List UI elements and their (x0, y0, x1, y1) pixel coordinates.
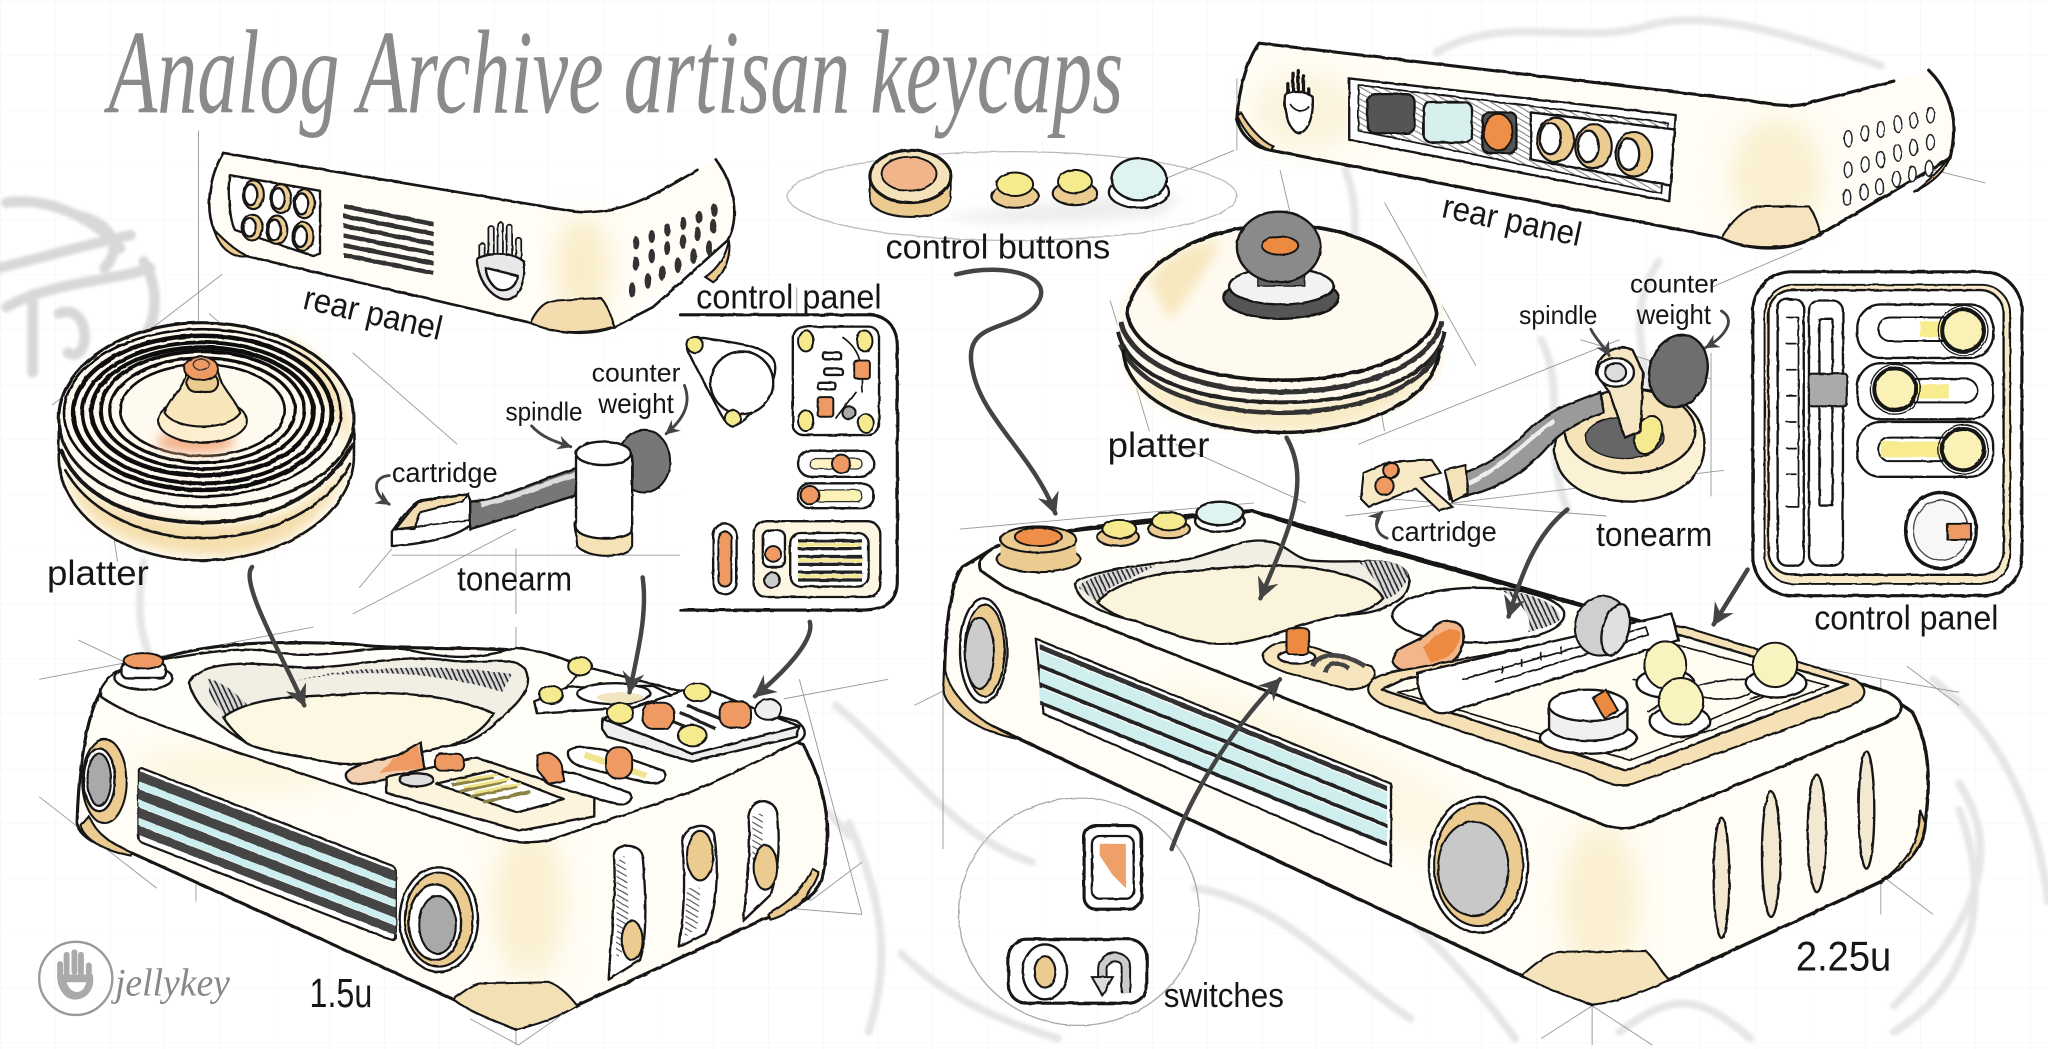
rear port recess (1349, 78, 1676, 201)
platter well (1075, 540, 1409, 644)
side slots (609, 801, 779, 980)
slider pad bottom (1857, 422, 1993, 477)
small hand logo (1285, 71, 1313, 133)
small well plate (534, 657, 679, 713)
arrow: platter to well right (1260, 438, 1297, 598)
belt diagram (687, 337, 775, 426)
top row buttons (997, 526, 1080, 572)
pill switch (713, 524, 737, 594)
label: counter weight: weight (1636, 299, 1711, 330)
rear vent slats (344, 204, 434, 275)
front tray (387, 754, 594, 831)
tone arm lever (346, 742, 424, 784)
rear dots (629, 204, 718, 298)
feet (81, 816, 819, 1029)
label: cartridge: cartridge (1391, 516, 1497, 547)
orange tonearm lever (1392, 621, 1463, 671)
panel: 1.5u rear panel illustration (209, 153, 734, 333)
rear port block (229, 175, 320, 256)
logo: jellykey (39, 942, 230, 1015)
panel: 1.5u control panel layout (680, 315, 897, 610)
panel: 2.25u platter (1117, 212, 1445, 432)
panel: 1.5u keycap (77, 643, 827, 1029)
label: rear panel: rear panel (300, 279, 446, 348)
vent module (754, 521, 880, 597)
dots (1843, 107, 1934, 205)
center spindle knob (1224, 212, 1339, 319)
label: counter weight: weight (597, 388, 674, 419)
slider pad top (1857, 304, 1993, 358)
label: counter weight (1630, 269, 1718, 330)
grille (138, 767, 396, 942)
label: tonearm: tonearm (457, 560, 572, 598)
label: 1.5u: 1.5u (310, 970, 372, 1016)
watercolor wash (131, 745, 566, 980)
label: counter weight: counter (1630, 269, 1718, 299)
panel: 2.25u rear panel illustration (1237, 43, 1954, 248)
platter well (189, 658, 528, 764)
toggle switch (1008, 939, 1147, 1003)
arrow: control panel right (1714, 570, 1748, 624)
label: control panel: control panel (1814, 600, 1998, 638)
long fader track (1778, 299, 1804, 566)
label: rear panel: rear panel (1439, 188, 1585, 254)
rocker switch (1084, 826, 1142, 909)
front speaker (400, 867, 478, 972)
hand logo (477, 225, 524, 299)
panel: 2.25u tonearm (1361, 328, 1716, 511)
top plate (101, 648, 805, 842)
label: 2.25u: 2.25u (1796, 933, 1891, 980)
panel: 2.25u control panel layout (1753, 272, 2022, 596)
feet (943, 666, 1925, 1004)
arrow: tonearm left (630, 577, 644, 692)
logo: jellykey: jellykey (110, 961, 230, 1004)
title: Analog Archive artisan keycaps (104, 5, 1123, 138)
arrow: switches (1172, 679, 1280, 849)
control pad diagram (793, 327, 879, 435)
slider 2 (798, 483, 874, 508)
label: spindle: spindle (1519, 300, 1597, 330)
arrow: control panel left (755, 622, 810, 696)
label: cartridge: cartridge (392, 457, 498, 488)
slider pad middle (1857, 363, 1993, 419)
panel: 2.25u keycap (943, 502, 1928, 1004)
left speaker (960, 598, 1007, 703)
control panel on keycap (1368, 590, 1864, 785)
label: control buttons: control buttons (886, 229, 1110, 267)
slider 1 (798, 451, 874, 477)
second well (1392, 588, 1565, 643)
orange top button (115, 653, 172, 690)
watercolor wash (1136, 661, 1639, 980)
rear feet (214, 230, 729, 332)
grille (1036, 639, 1391, 866)
side vents (1714, 751, 1874, 938)
big orange button (870, 150, 951, 217)
label: platter: platter (47, 554, 149, 593)
control pad (602, 683, 799, 762)
label: tonearm: tonearm (1596, 516, 1712, 554)
center fader (1809, 300, 1847, 566)
front speaker (1429, 797, 1528, 933)
small buttons (991, 172, 1038, 208)
label: platter: platter (1108, 426, 1210, 465)
label: spindle: spindle (505, 397, 583, 427)
body shape (944, 511, 1928, 1004)
arrow: tonearm right (1509, 509, 1567, 617)
left slider strips (537, 747, 665, 804)
rotary knob (1906, 492, 1976, 568)
label: control panel: control panel (696, 278, 882, 316)
switch plate (1263, 628, 1375, 689)
body shape (77, 643, 827, 1029)
panel: 1.5u platter (59, 323, 354, 560)
arrow: small callouts (376, 311, 1728, 538)
label: counter weight: counter (592, 357, 681, 387)
label: switches: switches (1164, 977, 1284, 1015)
arrow: control buttons to keycap (956, 270, 1055, 513)
panel: 1.5u tonearm (392, 430, 670, 556)
panel: switches magnifier (959, 798, 1199, 1025)
label: counter weight (592, 357, 681, 419)
feet (1237, 112, 1951, 247)
top plate (979, 511, 1901, 828)
panel: control buttons illustration (788, 150, 1237, 240)
arrow: platter to well left (250, 567, 304, 705)
left speaker (82, 739, 127, 823)
